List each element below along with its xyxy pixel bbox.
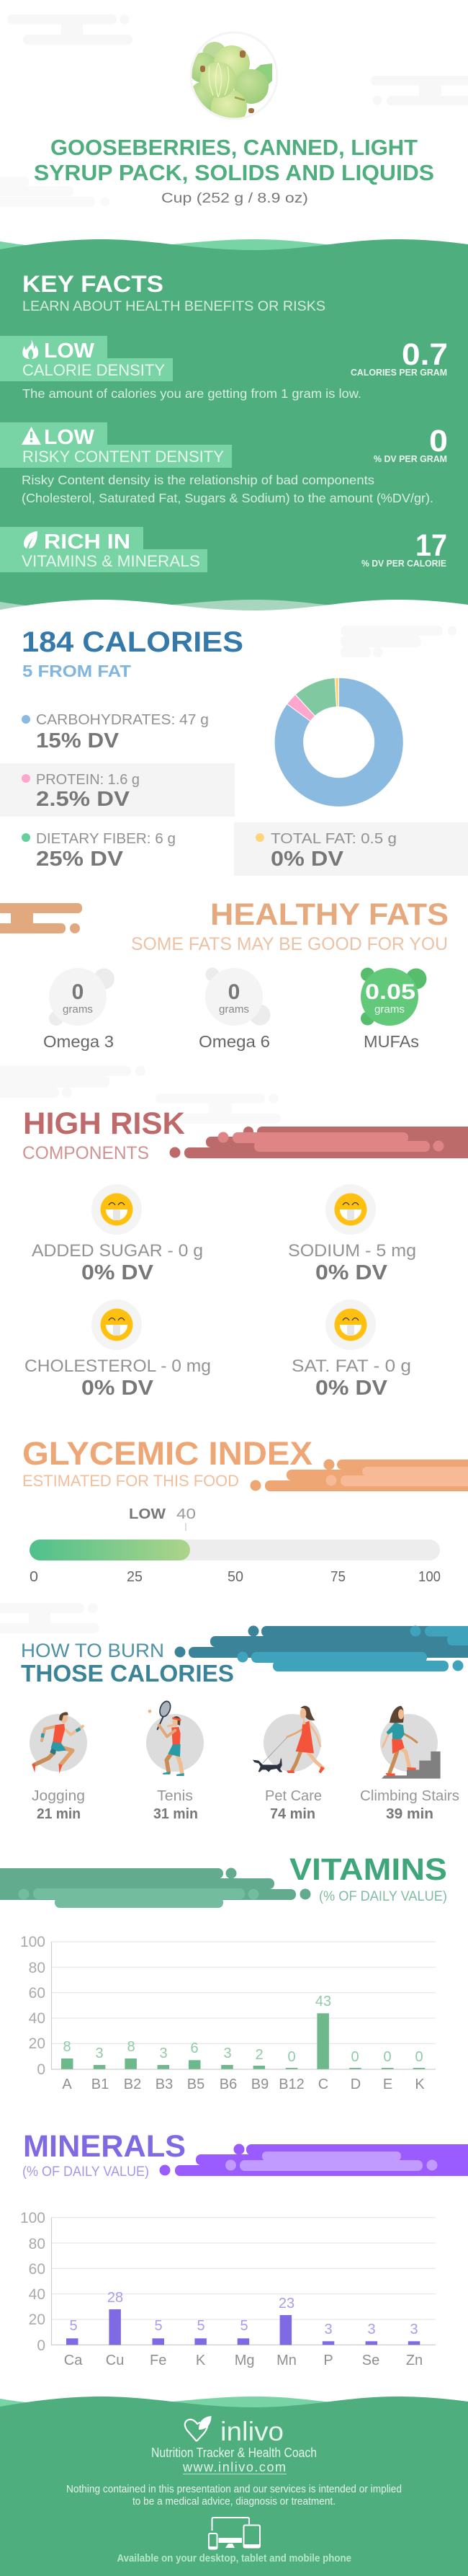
serving size: Cup (252 g / 8.9 oz): [161, 190, 308, 206]
panel: glycemic index: [22, 1435, 441, 1585]
decorative cloud: glycemic index: [251, 1459, 468, 1491]
bar chart: minerals: 28: [107, 2290, 123, 2306]
bar chart: minerals: Se: [362, 2353, 379, 2368]
bar chart: minerals: [20, 2210, 436, 2368]
bar chart: minerals: 5: [197, 2318, 205, 2334]
stat: mufas: grams: [374, 1003, 405, 1016]
stat: omega 6: Omega 6: [199, 1032, 270, 1051]
activity: tennis: Tenis: [157, 1788, 193, 1804]
gauge scale: [30, 1569, 441, 1585]
icon: smiley: [325, 1300, 376, 1350]
icon: woman climbing stairs: [380, 1706, 441, 1779]
activity: tennis: [146, 1700, 204, 1822]
bar chart: vitamins: 3: [95, 2046, 104, 2061]
bar chart: vitamins: 0: [287, 2049, 296, 2065]
bar chart: minerals: P: [323, 2353, 333, 2368]
tag: [0, 422, 232, 468]
bar chart: minerals: 5: [69, 2318, 78, 2334]
title: [34, 136, 434, 185]
item: cholesterol: 0% DV: [81, 1377, 154, 1400]
icon: tennis player: [146, 1700, 204, 1776]
bar chart: minerals: 60: [29, 2261, 45, 2278]
wave: top of key facts: [0, 239, 468, 259]
macro: protein: PROTEIN: 1.6 g: [36, 772, 140, 788]
fact: calorie density: [0, 336, 448, 401]
macro: carbohydrates: [22, 712, 209, 752]
tag: [0, 336, 173, 381]
bar chart: vitamins: B2: [124, 2077, 141, 2092]
tag: [0, 527, 207, 572]
panel: key facts: [0, 239, 468, 627]
icon: warning triangle: [22, 427, 41, 445]
bar chart: minerals: Zn: [406, 2353, 423, 2368]
bar chart: vitamins: B6: [220, 2077, 237, 2092]
heading: glycemic index: GLYCEMIC INDEX: [22, 1435, 312, 1472]
bar chart: vitamins: C: [318, 2077, 328, 2092]
decorative cloud: header lower left: [0, 177, 109, 207]
decorative cloud: header left: [7, 14, 132, 45]
macro: dietary fiber: [22, 831, 176, 871]
item: saturated fat: [292, 1300, 411, 1400]
icon: flame: [22, 339, 38, 359]
bar chart: vitamins: 0: [383, 2049, 392, 2065]
description: [22, 473, 433, 505]
macro: dietary fiber: DIETARY FIBER: 6 g: [36, 831, 176, 847]
bar chart: vitamins: 3: [223, 2046, 232, 2061]
bar chart: vitamins: 100: [20, 1934, 45, 1950]
disclaimer: Nothing contained in this presentation and our services is intended or implied: [66, 2483, 402, 2495]
bar chart: minerals: Fe: [150, 2353, 166, 2368]
gauge scale: 75: [330, 1569, 346, 1585]
bar chart: vitamins: 8: [127, 2039, 135, 2055]
fact: rich in vitamins and minerals: % DV PER CALORIE: [361, 558, 446, 569]
macro: total fat: [256, 831, 397, 871]
description: Risky Content density is the relationship of bad components: [22, 473, 374, 487]
website link: www.inlivo.com: [182, 2460, 286, 2474]
bar chart: vitamins: [20, 1934, 436, 2092]
decorative cloud: high risk: [170, 1127, 468, 1158]
stat: omega 6: grams: [219, 1003, 249, 1016]
bar chart: vitamins: B5: [187, 2077, 204, 2092]
panel: healthy fats: [43, 897, 449, 1051]
bar chart: vitamins: 0: [351, 2049, 359, 2065]
item: added sugar: ADDED SUGAR - 0 g: [32, 1241, 203, 1261]
subheading: ESTIMATED FOR THIS FOOD: [22, 1472, 239, 1490]
bar chart: vitamins: A: [62, 2077, 72, 2092]
bar chart: vitamins: E: [383, 2077, 392, 2092]
tagline: Nutrition Tracker & Health Coach: [151, 2446, 317, 2460]
wave: footer back: [0, 2397, 468, 2415]
item: cholesterol: CHOLESTEROL - 0 mg: [24, 1356, 211, 1376]
bar chart: vitamins: 43: [315, 1994, 331, 2009]
gauge marker: [129, 1506, 196, 1531]
fact: rich in vitamins and minerals: RICH IN: [44, 530, 130, 554]
activity: jogging: [30, 1712, 87, 1822]
activity: pet care: [253, 1706, 325, 1822]
bar chart: minerals: 3: [410, 2322, 418, 2337]
heading: key facts: KEY FACTS: [22, 271, 163, 297]
gauge scale: 100: [418, 1569, 441, 1585]
icon: leaf: [24, 531, 37, 548]
gauge marker: LOW: [129, 1506, 166, 1522]
panel: minerals: [20, 2129, 436, 2368]
bar chart: vitamins: 60: [29, 1985, 45, 2002]
disclaimer: [66, 2483, 402, 2508]
macro rows background: [0, 763, 468, 876]
panel: calories: [0, 626, 468, 876]
bar chart: minerals: Mg: [235, 2353, 254, 2368]
panel: how to burn: [21, 1640, 459, 1822]
disclaimer: to be a medical advice, diagnosis or treatment.: [132, 2495, 336, 2508]
gauge bar: [30, 1540, 440, 1560]
gauge scale: 0: [30, 1569, 38, 1585]
decorative cloud: burn right: [174, 1626, 468, 1671]
stat: omega 3: Omega 3: [43, 1032, 114, 1051]
value: 0: [429, 424, 448, 458]
macro: carbohydrates: 15% DV: [36, 729, 120, 752]
activity: jogging: Jogging: [32, 1788, 85, 1804]
macro: total fat: TOTAL FAT: 0.5 g: [271, 831, 397, 847]
stat: mufas: 0.05: [365, 980, 415, 1004]
stat: mufas: MUFAs: [364, 1032, 419, 1051]
bar chart: vitamins: 0: [415, 2049, 423, 2065]
decorative cloud: calories: [341, 626, 456, 657]
activity: climbing stairs: Climbing Stairs: [360, 1788, 459, 1804]
decorative cloud: minerals: [160, 2144, 468, 2176]
heading: minerals: MINERALS: [23, 2129, 186, 2164]
bar chart: vitamins: B12: [279, 2077, 305, 2092]
subheading: from fat: 5 FROM FAT: [22, 662, 132, 680]
heading: vitamins: VITAMINS: [289, 1852, 447, 1887]
heading: those calories: THOSE CALORIES: [21, 1660, 234, 1687]
panel: high risk: [22, 1106, 416, 1400]
activity: climbing stairs: 39 min: [386, 1806, 433, 1822]
gauge scale: 25: [127, 1569, 143, 1585]
macro: dietary fiber: 25% DV: [36, 848, 124, 871]
bar chart: minerals: 3: [324, 2322, 333, 2337]
bar chart: minerals: Cu: [106, 2353, 124, 2368]
logo: inlivo: inlivo: [220, 2417, 284, 2446]
icon: devices: [209, 2518, 260, 2549]
fact: rich in vitamins and minerals: VITAMINS & MINERALS: [22, 552, 200, 570]
fact: calorie density: CALORIES PER GRAM: [351, 367, 447, 378]
logo: inlivo: [185, 2416, 284, 2446]
title: SYRUP PACK, SOLIDS AND LIQUIDS: [34, 161, 434, 185]
icon: smiley: [325, 1184, 376, 1235]
bar chart: minerals: 40: [29, 2286, 45, 2303]
bar chart: vitamins: 6: [190, 2040, 199, 2056]
bar chart: minerals: 20: [29, 2311, 45, 2328]
subheading: (% OF DAILY VALUE): [319, 1889, 447, 1904]
bar chart: vitamins: 80: [29, 1960, 45, 1976]
item: added sugar: 0% DV: [81, 1261, 154, 1284]
bar chart: vitamins: 0: [37, 2061, 45, 2078]
bar chart: minerals: 5: [240, 2318, 248, 2334]
macro: protein: [22, 772, 140, 811]
donut chart: [274, 678, 403, 807]
bar chart: minerals: 5: [154, 2318, 163, 2334]
subheading: (% OF DAILY VALUE): [22, 2164, 149, 2180]
subheading: SOME FATS MAY BE GOOD FOR YOU: [131, 934, 448, 954]
title: GOOSEBERRIES, CANNED, LIGHT: [50, 136, 418, 160]
description: (Cholesterol, Saturated Fat, Sugars & Sodium) to the amount (%DV/gr).: [22, 491, 433, 505]
bar chart: vitamins: 3: [159, 2046, 168, 2061]
fact: rich in vitamins and minerals: [0, 527, 447, 572]
fact: risky content density: [0, 422, 448, 505]
value: 17: [415, 528, 447, 563]
bar chart: vitamins: B9: [251, 2077, 269, 2092]
icon: smiley: [91, 1184, 142, 1235]
decorative cloud: between sections left: [0, 1066, 145, 1098]
value: 0.7: [402, 337, 448, 372]
macro: total fat: 0% DV: [271, 848, 344, 871]
stat: omega 6: [199, 967, 271, 1051]
bar chart: minerals: 0: [37, 2337, 45, 2354]
bar chart: minerals: 23: [279, 2296, 294, 2311]
fact: risky content density: RISKY CONTENT DENSITY: [22, 448, 224, 466]
item: sodium: 0% DV: [315, 1261, 388, 1284]
heading: healthy fats: HEALTHY FATS: [210, 897, 449, 932]
bar chart: minerals: K: [196, 2353, 206, 2368]
gauge marker: 40: [176, 1506, 196, 1522]
icon: woman walking dog: [253, 1706, 325, 1773]
key facts background: [0, 239, 468, 620]
item: sodium: [288, 1184, 416, 1284]
icon: jogger: [30, 1712, 87, 1774]
heading: high risk: HIGH RISK: [23, 1106, 185, 1141]
stat: omega 6: 0: [228, 980, 240, 1004]
subheading: LEARN ABOUT HEALTH BENEFITS OR RISKS: [22, 298, 325, 314]
item: added sugar: [32, 1184, 203, 1284]
item: saturated fat: SAT. FAT - 0 g: [292, 1356, 411, 1376]
bar chart: vitamins: 8: [63, 2039, 71, 2055]
item: sodium: SODIUM - 5 mg: [288, 1241, 416, 1261]
macro: carbohydrates: CARBOHYDRATES: 47 g: [36, 712, 209, 728]
bar chart: vitamins: D: [351, 2077, 361, 2092]
decorative cloud: healthy fats: [0, 903, 82, 933]
activity: climbing stairs: [360, 1706, 459, 1822]
activity: jogging: 21 min: [37, 1806, 81, 1822]
fact: calorie density: LOW: [44, 339, 95, 363]
heading: calories: 184 CALORIES: [22, 626, 243, 658]
bar chart: minerals: 80: [29, 2236, 45, 2252]
stat: mufas: [361, 967, 426, 1051]
bar chart: minerals: 3: [367, 2322, 376, 2337]
gauge scale: 50: [228, 1569, 243, 1585]
icon: smiley: [91, 1300, 142, 1350]
bar chart: minerals: Mn: [276, 2353, 297, 2368]
wave: white edge: [0, 600, 468, 627]
item: saturated fat: 0% DV: [315, 1377, 388, 1400]
bar chart: vitamins: B1: [91, 2077, 109, 2092]
decorative cloud: header right: [371, 76, 468, 105]
bar chart: minerals: Ca: [64, 2353, 83, 2368]
wave: bottom of key facts: [0, 600, 468, 620]
bar chart: vitamins: K: [415, 2077, 425, 2092]
food photo: gooseberries: [188, 32, 277, 125]
panel: vitamins: [20, 1852, 447, 2092]
activity: pet care: Pet Care: [265, 1788, 322, 1804]
bar chart: vitamins: 40: [29, 2010, 45, 2027]
bar chart: vitamins: 2: [255, 2047, 264, 2063]
stat: omega 3: [43, 968, 114, 1051]
fact: calorie density: CALORIE DENSITY: [22, 361, 165, 379]
availability note: Available on your desktop, tablet and mobile phone: [117, 2552, 351, 2564]
stat: omega 3: 0: [72, 980, 84, 1004]
decorative cloud: vitamins: [0, 1868, 311, 1908]
heading: how to burn: HOW TO BURN: [21, 1640, 164, 1661]
subheading: components: COMPONENTS: [22, 1143, 149, 1163]
fact: risky content density: LOW: [44, 426, 95, 449]
fact: risky content density: % DV PER GRAM: [374, 453, 447, 464]
panel: footer: [0, 2397, 468, 2576]
bar chart: vitamins: B3: [156, 2077, 173, 2092]
description: The amount of calories you are getting from 1 gram is low.: [22, 386, 361, 401]
decorative cloud: between sections center: [156, 1093, 281, 1124]
footer background: [0, 2397, 468, 2576]
activity: tennis: 31 min: [153, 1806, 198, 1822]
bar chart: vitamins: 20: [29, 2035, 45, 2052]
bar chart: minerals: 100: [20, 2210, 45, 2226]
item: cholesterol: [24, 1300, 211, 1400]
macro: protein: 2.5% DV: [36, 788, 130, 811]
decorative cloud: burn left: [0, 1603, 99, 1633]
stat: omega 3: grams: [63, 1003, 93, 1016]
activity: pet care: 74 min: [270, 1806, 315, 1822]
